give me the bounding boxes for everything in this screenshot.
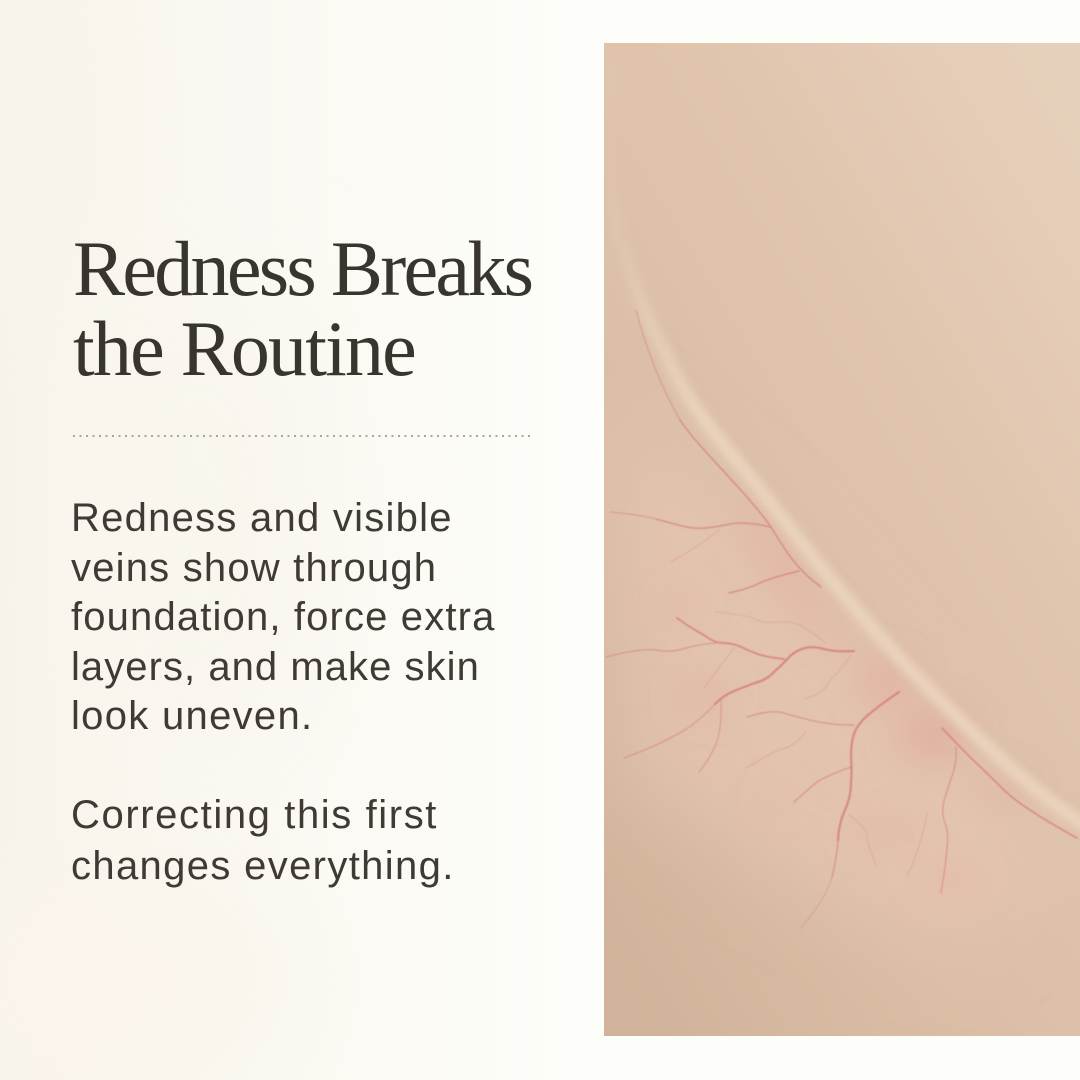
body text: problem description: veins show through	[71, 546, 437, 590]
redness glow along the fold	[664, 495, 1026, 904]
title	[73, 225, 532, 392]
veins: main	[606, 310, 1077, 928]
body text: problem description: foundation, force extra	[71, 595, 495, 639]
title: the Routine	[73, 305, 415, 392]
body text: problem description: Redness and visible	[71, 496, 453, 540]
fold shadow	[667, 324, 1080, 819]
image panel: skin with visible veins	[604, 43, 1080, 1036]
veins: faint	[671, 530, 927, 877]
skin fold curve	[610, 190, 1080, 825]
title: Redness Breaks	[73, 225, 531, 312]
body text: conclusion	[71, 793, 455, 888]
body text: conclusion: changes everything.	[71, 844, 455, 888]
pink skin tone around veins	[610, 400, 1060, 960]
body text: problem description	[71, 496, 495, 738]
body text: problem description: look uneven.	[71, 694, 313, 738]
dotted divider	[73, 435, 530, 437]
body text: conclusion: Correcting this first	[71, 793, 438, 837]
faint upper arc	[609, 60, 618, 240]
body text: problem description: layers, and make skin	[71, 644, 480, 688]
